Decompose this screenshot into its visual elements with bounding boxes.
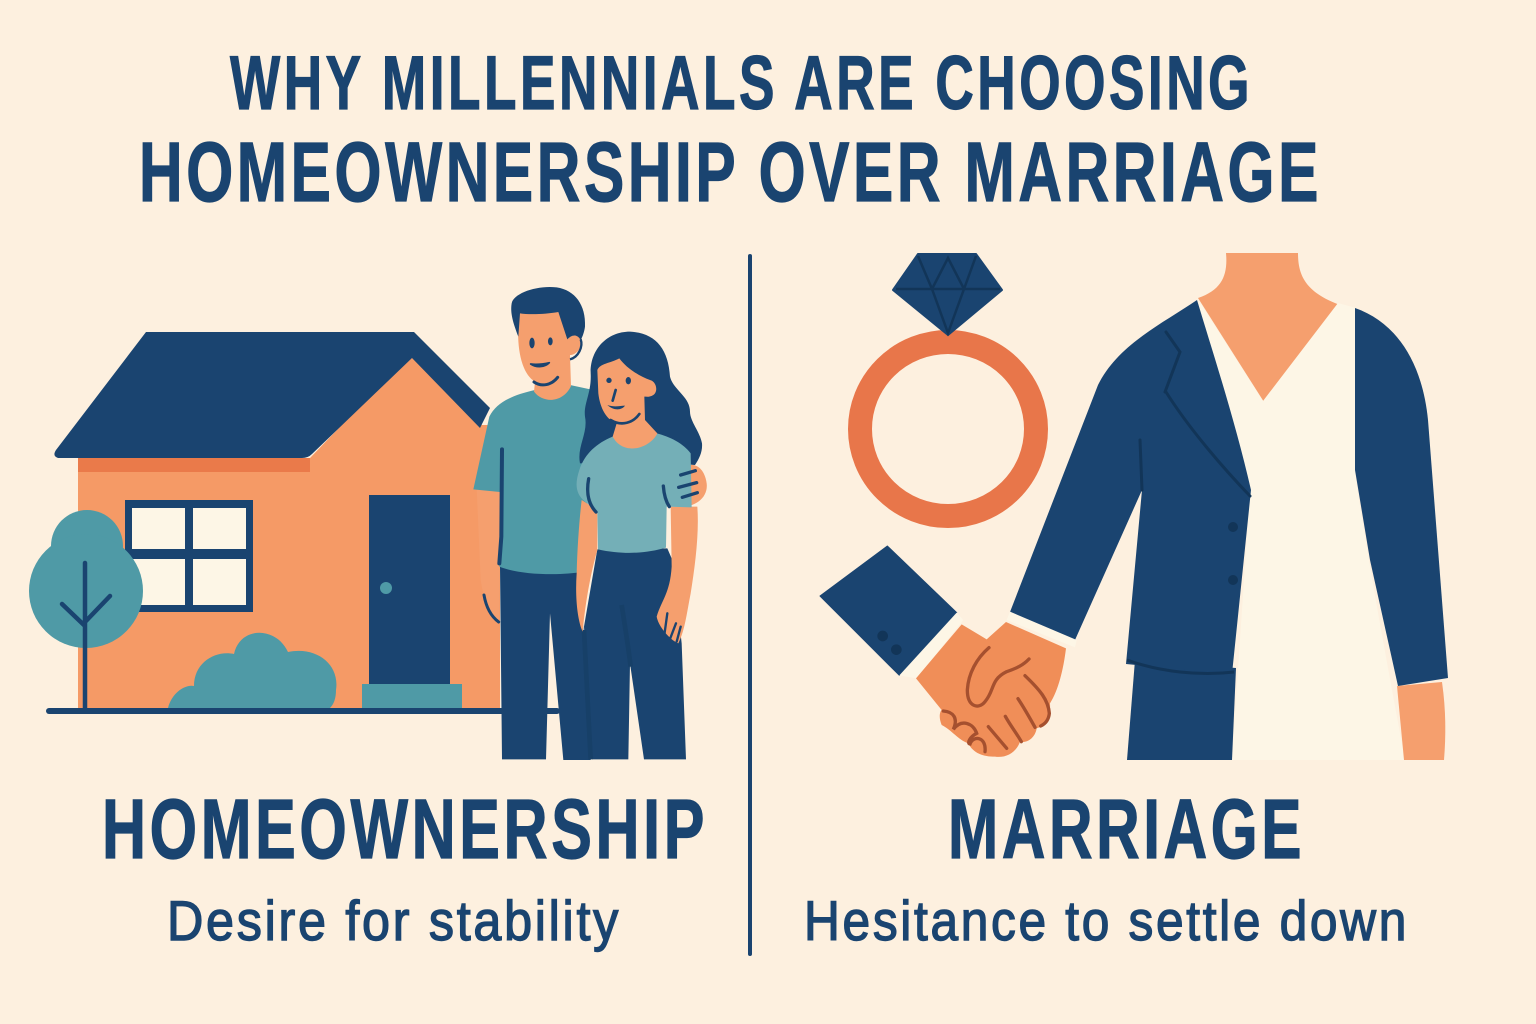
illustration: ring bbox=[860, 254, 1036, 516]
caption: hesitance to settle down: Hesitance to settle down bbox=[804, 889, 1409, 952]
woman fingers bbox=[664, 613, 681, 643]
hand lines bbox=[943, 648, 1049, 752]
left sleeve bbox=[820, 546, 957, 675]
illustration: handshake bbox=[820, 546, 1077, 757]
step bbox=[362, 684, 462, 709]
section heading: homeownership: HOMEOWNERSHIP bbox=[102, 782, 708, 876]
title bbox=[139, 41, 1322, 219]
left cuff bbox=[899, 613, 963, 678]
illustration: couple in suit and dress bbox=[1010, 253, 1448, 760]
woman face details bbox=[606, 378, 612, 383]
jacket details bbox=[1140, 332, 1250, 496]
illustration: house bbox=[29, 332, 560, 714]
ground line bbox=[46, 708, 560, 714]
illustration: couple bbox=[473, 287, 707, 760]
man pants bbox=[500, 567, 591, 760]
ring band bbox=[860, 342, 1036, 516]
man shirt bbox=[473, 385, 593, 574]
man neck and face bbox=[517, 312, 582, 400]
divider bbox=[748, 254, 752, 956]
man face details bbox=[570, 339, 581, 359]
diamond bbox=[893, 254, 1002, 335]
woman back hair bbox=[579, 332, 702, 465]
bride arm skin bbox=[1397, 682, 1445, 760]
caption: desire for stability: Desire for stability bbox=[167, 889, 621, 952]
door bbox=[369, 495, 450, 684]
dress bbox=[1197, 298, 1405, 760]
woman bbox=[576, 332, 707, 759]
roof bbox=[54, 332, 490, 458]
man hand on shoulder bbox=[678, 465, 707, 507]
bush bbox=[168, 633, 336, 708]
tree bbox=[29, 510, 143, 708]
right cuff bbox=[1007, 612, 1077, 647]
eave shadow bbox=[78, 458, 310, 472]
suit jacket bbox=[1010, 300, 1251, 674]
neck and chest bbox=[1198, 253, 1340, 402]
man bbox=[473, 287, 593, 760]
man arm bbox=[477, 488, 501, 623]
groom trousers bbox=[1127, 660, 1236, 760]
woman face and neck bbox=[597, 358, 657, 448]
bride sleeve bbox=[1355, 308, 1448, 686]
woman left arm bbox=[576, 500, 597, 632]
man hair bbox=[511, 287, 585, 340]
house wall bbox=[78, 352, 500, 710]
woman pants bbox=[584, 548, 686, 759]
window bbox=[125, 500, 253, 612]
clasped hands bbox=[916, 622, 1066, 757]
section heading: marriage: MARRIAGE bbox=[948, 782, 1305, 876]
woman right arm bbox=[657, 507, 698, 643]
man fingers bbox=[679, 471, 697, 497]
woman shirt bbox=[577, 433, 692, 553]
